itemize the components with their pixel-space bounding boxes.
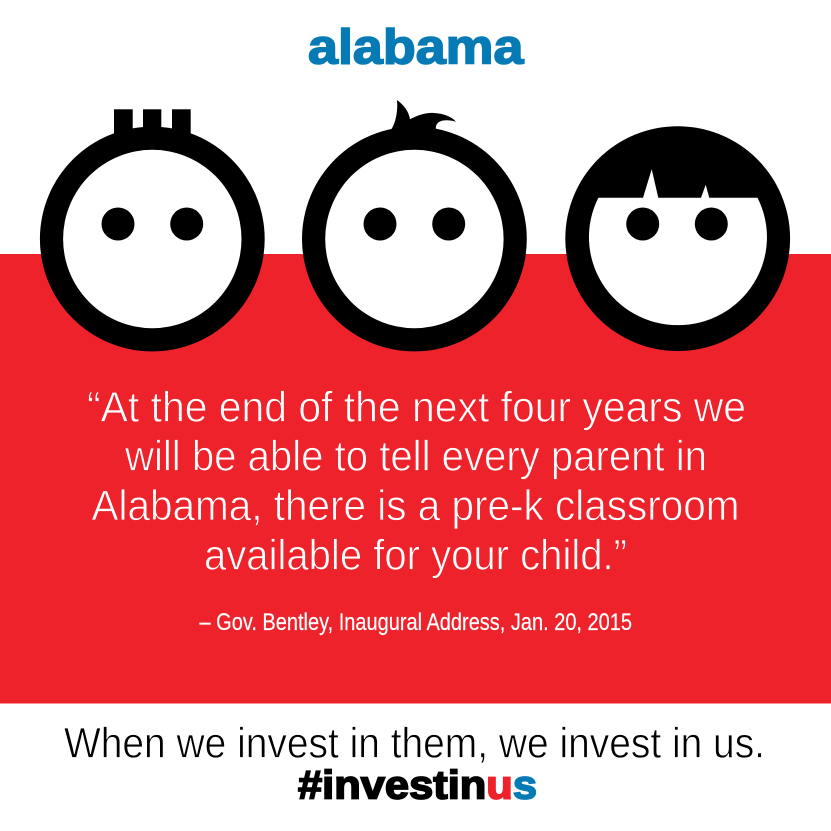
icon: face with swoosh hair (302, 100, 527, 351)
quote text: available for your child.” (204, 531, 627, 579)
quote text: will be able to tell every parent in (124, 433, 707, 481)
quote text (87, 384, 746, 579)
title: alabama: alabama (308, 20, 524, 74)
hashtag: #investinus: #investin us (298, 764, 537, 808)
quote attribution: – Gov. Bentley, Inaugural Address, Jan. 20, 2015 (200, 609, 632, 636)
icon: face with three-tooth crown hair (40, 109, 265, 351)
icon: face with fringe hair (565, 126, 790, 351)
tagline: When we invest in them, we invest in us. (64, 720, 765, 768)
panel: red quote background (0, 254, 831, 704)
quote text: Alabama, there is a pre-k classroom (92, 482, 740, 530)
quote text: “At the end of the next four years we (87, 384, 746, 432)
